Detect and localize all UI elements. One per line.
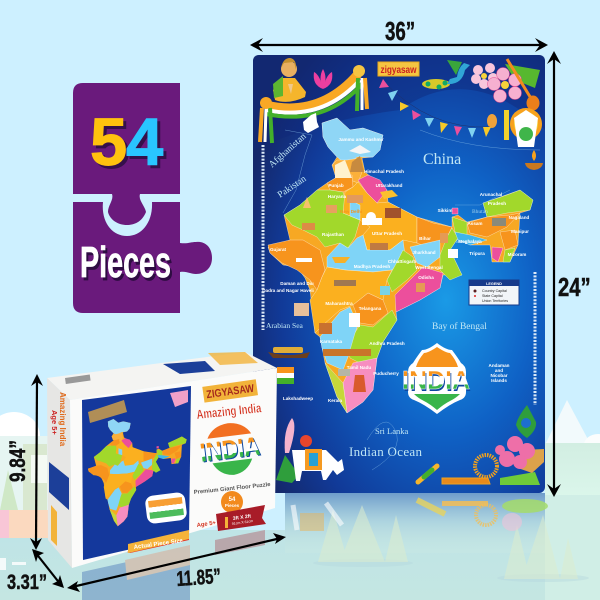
logo	[378, 62, 419, 76]
number 54	[90, 105, 166, 183]
state labels: Uttar Pradesh	[372, 231, 402, 236]
box front face	[70, 368, 277, 568]
box size ribbon: 3ft X 2ft	[232, 513, 252, 522]
country and sea labels: Indian Ocean	[349, 444, 422, 459]
banner: actual piece size	[127, 530, 189, 553]
state labels: Kerala	[328, 398, 342, 403]
icon: oil lamp	[525, 150, 543, 170]
country and sea labels: Sri Lanka	[375, 426, 409, 436]
box age label: Age 5+	[196, 520, 217, 529]
label 9.84 inches: 9.84”	[6, 440, 31, 482]
state labels: and	[495, 368, 503, 373]
state labels: Jharkhand	[412, 250, 436, 255]
state labels: Daman and Diu	[280, 281, 314, 286]
icon: feather and leaves	[276, 418, 312, 483]
box pieces badge: Pieces	[225, 503, 240, 508]
state labels: Madhya Pradesh	[354, 264, 390, 269]
state labels: Himachal Pradesh	[364, 169, 404, 174]
box pieces badge	[221, 491, 243, 513]
state labels: West Bengal	[415, 265, 443, 270]
legend: Union Territories	[482, 299, 508, 303]
box size ribbon: 91cm X 61cm	[232, 519, 253, 526]
state labels: Pradesh	[488, 201, 506, 206]
icon: knots	[260, 65, 365, 109]
background scenery: city and mountains	[0, 400, 600, 600]
number 54: 4	[129, 108, 166, 183]
country and sea labels: China	[423, 151, 461, 168]
box size ribbon	[216, 505, 266, 531]
country and sea labels: Bay of Bengal	[432, 321, 487, 332]
puzzle icon: 54 pieces	[73, 83, 212, 313]
logo: zigyasaw	[380, 65, 417, 76]
country and sea labels: Bangladesh	[456, 239, 482, 245]
number 54: 5	[93, 108, 130, 183]
state labels: Islands	[491, 378, 507, 383]
legend: State Capital	[482, 294, 503, 298]
state labels: Arunachal	[480, 192, 502, 197]
state labels: Tripura	[469, 251, 485, 256]
box india badge	[197, 420, 264, 479]
state labels: Lakshadweep	[283, 396, 313, 401]
box title: Amazing India	[196, 400, 263, 422]
label 36 inches: 36”	[385, 16, 415, 46]
country and sea labels: Afghanistan	[267, 131, 309, 170]
width arrow: 36 inches	[250, 38, 548, 52]
country and sea labels: Bhutan	[472, 209, 488, 215]
state labels: Maharashtra	[325, 301, 353, 306]
state labels: Bihar	[419, 236, 431, 241]
icon: holy cow	[292, 449, 344, 481]
box india badge: INDIA	[198, 431, 262, 468]
board reflection	[285, 493, 589, 582]
icon: peacock feather	[516, 405, 536, 438]
state labels: Telangana	[359, 306, 382, 311]
box left face: Age 5+	[50, 410, 59, 435]
country and sea labels: Arabian Sea	[266, 321, 304, 330]
panel: puzzle board	[253, 55, 545, 493]
height arrow: 24 inches	[547, 51, 561, 497]
number 54: 4	[126, 105, 163, 180]
box india badge: INDIA	[199, 431, 263, 469]
label Pieces: Pieces	[82, 241, 173, 290]
number 54: 5	[90, 105, 127, 180]
country and sea labels	[266, 131, 488, 459]
icon: indian flag	[277, 367, 294, 384]
state labels: Mizoram	[508, 252, 526, 257]
state labels: New Delhi	[340, 209, 362, 214]
label 3.31 inches: 3.31”	[7, 570, 47, 593]
state labels: Nagaland	[509, 215, 530, 220]
icon: houseboat	[268, 347, 310, 358]
right border pattern	[534, 272, 536, 405]
icon: frangipani flowers	[471, 63, 540, 102]
state labels: Manipur	[511, 229, 529, 234]
icon: kite spool	[418, 466, 437, 482]
left border pattern	[262, 145, 264, 330]
box top face	[47, 352, 277, 400]
icon: kathakali mask	[510, 108, 542, 147]
decorative neighbours outline	[283, 130, 540, 470]
state labels: Rajasthan	[322, 232, 344, 237]
icon: dove	[303, 113, 319, 133]
state labels: Dadra and Nagar Haveli	[262, 288, 314, 293]
state labels: Uttarakhand	[376, 183, 403, 188]
state labels: Andhra Pradesh	[369, 341, 405, 346]
india map	[268, 118, 533, 413]
state labels: Jammu and Kashmir	[338, 137, 384, 142]
icon: hanging lantern and tassel	[487, 110, 509, 140]
state labels: Odisha	[418, 275, 434, 280]
box pieces badge: 54	[229, 497, 236, 503]
legend	[469, 280, 519, 305]
box subtitle: Premium Giant Floor Puzzle	[194, 482, 272, 496]
depth arrow: 3.31 inches	[32, 549, 64, 588]
box reflection	[82, 530, 265, 600]
landmarks on map	[294, 145, 506, 392]
state labels: Chhattisgarh	[388, 259, 416, 264]
state labels	[262, 137, 530, 403]
box logo: ZIGYASAW	[206, 383, 255, 401]
icon: veena	[507, 59, 540, 110]
india badge: INDIA	[402, 365, 470, 395]
label 24 inches: 24”	[558, 273, 591, 302]
state labels: Meghalaya	[458, 239, 482, 244]
tricolor ribbon	[260, 74, 367, 143]
state labels: Andaman	[489, 363, 510, 368]
panel: product box	[47, 352, 277, 568]
state labels: Nicobar	[490, 373, 508, 378]
india badge: INDIA	[403, 367, 471, 397]
label 11.85 inches: 11.85”	[176, 563, 222, 591]
legend: Country Capital	[482, 289, 507, 293]
height arrow: 9.84 inches	[30, 374, 43, 550]
state labels: Sikkim	[438, 208, 452, 213]
length arrow: 11.85 inches	[67, 533, 286, 592]
state labels: Assam	[467, 221, 483, 226]
state labels: Puducherry	[373, 371, 399, 376]
label Pieces: Pieces	[80, 238, 171, 287]
country and sea labels: Pakistan	[276, 174, 309, 200]
india badge	[402, 343, 471, 414]
state labels: Karnataka	[320, 339, 343, 344]
icon: lotus	[314, 69, 332, 89]
state labels: Punjab	[328, 183, 344, 188]
box map picture	[82, 386, 191, 560]
state labels: Tamil Nadu	[347, 365, 371, 370]
icon: charkha wheel	[442, 455, 497, 484]
legend: LEGEND	[486, 282, 502, 286]
state labels: Haryana	[328, 194, 347, 199]
state labels: Gujarat	[270, 247, 287, 252]
label Pieces	[80, 238, 173, 290]
bunting flags	[379, 79, 491, 138]
box left face	[47, 378, 72, 568]
icon: hibiscus	[495, 436, 544, 485]
box left face: Amazing India	[58, 392, 67, 447]
icon: namaste woman	[273, 58, 306, 102]
box map picture: Actual Piece Size	[133, 538, 184, 551]
icon: peacock	[422, 60, 470, 90]
